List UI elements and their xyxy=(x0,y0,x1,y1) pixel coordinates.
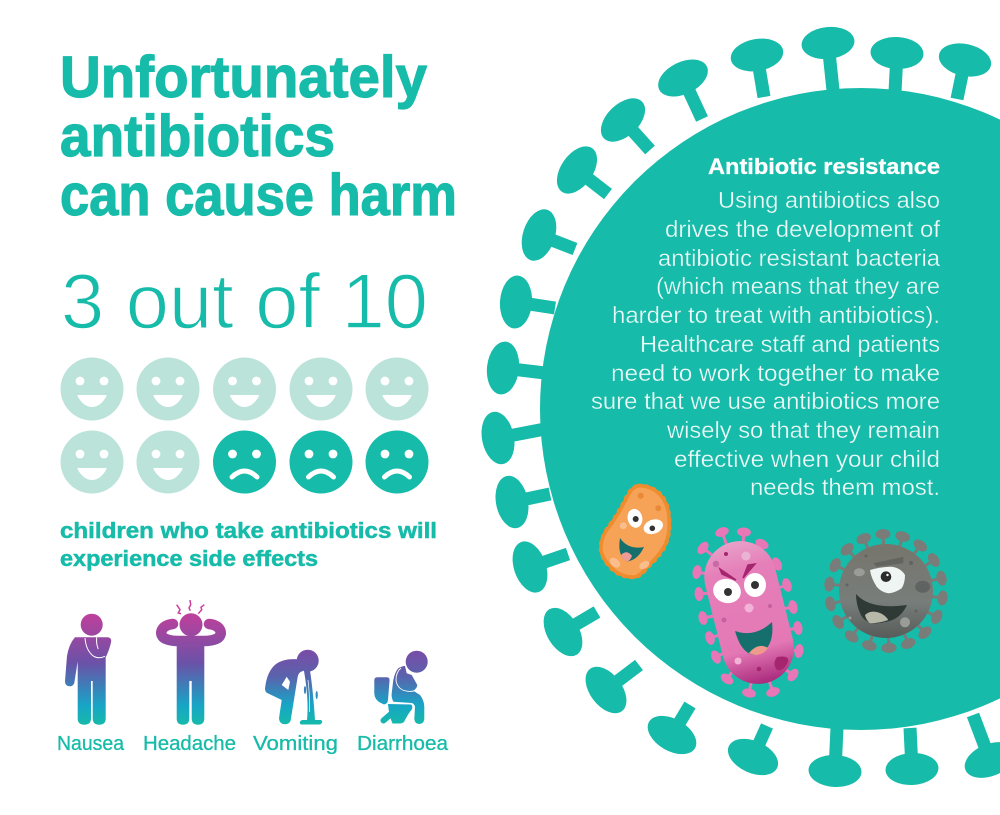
happy face 7 xyxy=(136,430,200,494)
pictogram: ten faces xyxy=(60,358,428,494)
caption: side effects: experience side effects xyxy=(60,546,318,571)
text block: antibiotic resistance explanation: (which means that they are xyxy=(656,273,940,299)
label: symptoms: Diarrhoea xyxy=(357,733,449,755)
sad face 2 xyxy=(290,430,352,494)
happy face 2 xyxy=(136,358,200,420)
text block: antibiotic resistance explanation: drives the development of xyxy=(665,216,941,242)
illustration: pink bacterium xyxy=(691,525,804,699)
title: antibiotics xyxy=(60,104,335,169)
panel: virus-shaped circle xyxy=(477,24,1000,788)
happy face 5 xyxy=(366,358,428,420)
caption: side effects xyxy=(60,518,437,571)
statistic: 3 out of 10: 3 out of 10 xyxy=(61,257,428,345)
illustration: grey virus xyxy=(824,529,948,653)
label: symptoms: Headache xyxy=(143,733,236,755)
text block: antibiotic resistance explanation: effective when your child xyxy=(674,446,940,472)
label: symptoms: Nausea xyxy=(57,733,125,755)
happy face 4 xyxy=(290,358,352,420)
text block: antibiotic resistance explanation: Using antibiotics also xyxy=(718,187,940,213)
icon: diarrhoea figure xyxy=(374,651,428,724)
label: symptoms xyxy=(57,733,449,755)
icon: headache figure xyxy=(161,600,221,725)
text block: antibiotic resistance explanation: need to work together to make xyxy=(611,360,940,386)
icon: nausea figure xyxy=(65,614,111,725)
text block: antibiotic resistance explanation: harder to treat with antibiotics). xyxy=(612,302,940,328)
happy face 6 xyxy=(60,430,124,494)
text block: antibiotic resistance explanation: wisely so that they remain xyxy=(666,417,940,443)
text block: antibiotic resistance explanation: antibiotic resistant bacteria xyxy=(658,245,940,271)
label: symptoms: Vomiting xyxy=(253,733,338,755)
happy face 1 xyxy=(60,358,124,420)
illustration: orange bacterium xyxy=(600,485,670,578)
title: can cause harm xyxy=(60,163,457,228)
title: Unfortunately xyxy=(60,45,427,110)
caption: side effects: children who take antibiotics will xyxy=(60,518,437,543)
text block: antibiotic resistance explanation: needs them most. xyxy=(750,474,940,500)
icon: vomiting figure xyxy=(265,650,322,724)
text block: antibiotic resistance explanation: sure that we use antibiotics more xyxy=(591,388,940,414)
title xyxy=(60,45,457,228)
happy face 3 xyxy=(213,358,276,420)
sad face 1 xyxy=(213,430,276,494)
sad face 3 xyxy=(366,430,428,494)
heading: antibiotic resistance: Antibiotic resistance xyxy=(708,154,940,179)
text block: antibiotic resistance explanation xyxy=(591,187,941,500)
text block: antibiotic resistance explanation: Healthcare staff and patients xyxy=(640,331,940,357)
